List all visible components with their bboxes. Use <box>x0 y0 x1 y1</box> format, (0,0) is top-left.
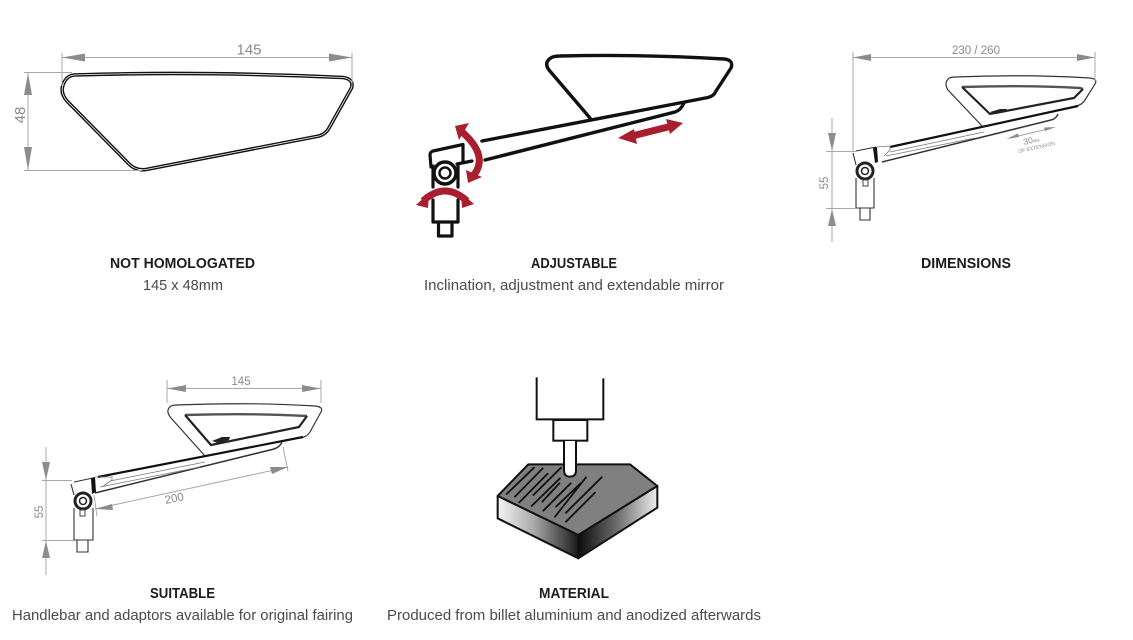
extending arm <box>877 106 1078 162</box>
red straight arrow: extension <box>618 119 683 144</box>
width dimension 230 / 260 <box>853 45 1095 152</box>
heading: dimensions: DIMENSIONS <box>921 256 1011 272</box>
red curved arrow: inclination <box>455 123 482 183</box>
extending arm <box>95 437 303 493</box>
panel: dimensions <box>819 45 1096 272</box>
width dimension 230 / 260: 230 / 260 <box>952 45 1000 57</box>
height dimension 55 <box>34 447 74 575</box>
width dimension 145: 145 <box>231 376 251 388</box>
arm length dimension 200: 200 <box>164 491 185 507</box>
block left side <box>498 496 578 558</box>
height dimension 48: 48 <box>12 107 29 123</box>
height dimension 55 <box>819 118 856 242</box>
heading: suitable: SUITABLE <box>150 586 215 602</box>
text: suitable description: Handlebar and adaptors available for original fairing <box>12 608 353 624</box>
panel: suitable <box>12 376 353 624</box>
width dimension 145: 145 <box>236 42 262 58</box>
text: size: 145 x 48mm <box>143 278 223 294</box>
milling tool spindle <box>537 377 603 419</box>
heading: adjustable: ADJUSTABLE <box>531 256 617 272</box>
block top face <box>498 464 657 535</box>
pivot and stem <box>71 477 96 552</box>
extension dimension 30 mm <box>1006 127 1056 155</box>
mirror and arm outline <box>482 55 732 160</box>
extension dimension 30 mm: OF EXTENSION <box>1018 141 1056 155</box>
red curved arrow: rotation <box>416 191 474 208</box>
mirror side drawing <box>946 76 1096 127</box>
width dimension 145 <box>62 42 352 86</box>
text: material description: Produced from billet aluminium and anodized afterwards <box>387 608 761 624</box>
height dimension 55: 55 <box>34 506 46 518</box>
width dimension 145 <box>167 376 321 403</box>
block right side <box>578 486 657 558</box>
pivot and stem <box>430 144 472 236</box>
panel: material <box>387 377 761 624</box>
cutter bit <box>564 441 576 477</box>
tool holder <box>553 420 587 441</box>
heading: material: MATERIAL <box>539 586 609 602</box>
text: adjustable description: Inclination, adjustment and extendable mirror <box>424 278 724 294</box>
milling hatches <box>507 468 602 522</box>
extension dimension 30 mm: 30MM <box>1022 133 1040 147</box>
panel: not homologated <box>12 42 352 294</box>
heading: not homologated: NOT HOMOLOGATED <box>110 256 255 272</box>
arm length dimension 200 <box>94 447 288 516</box>
height dimension 55: 55 <box>819 177 831 189</box>
mirror side drawing <box>168 404 322 456</box>
machined billet block with milling tool <box>498 377 657 558</box>
height dimension 48 <box>12 72 142 171</box>
pivot and stem <box>853 147 878 220</box>
mirror outline front view <box>62 73 352 170</box>
panel: adjustable <box>416 55 732 294</box>
